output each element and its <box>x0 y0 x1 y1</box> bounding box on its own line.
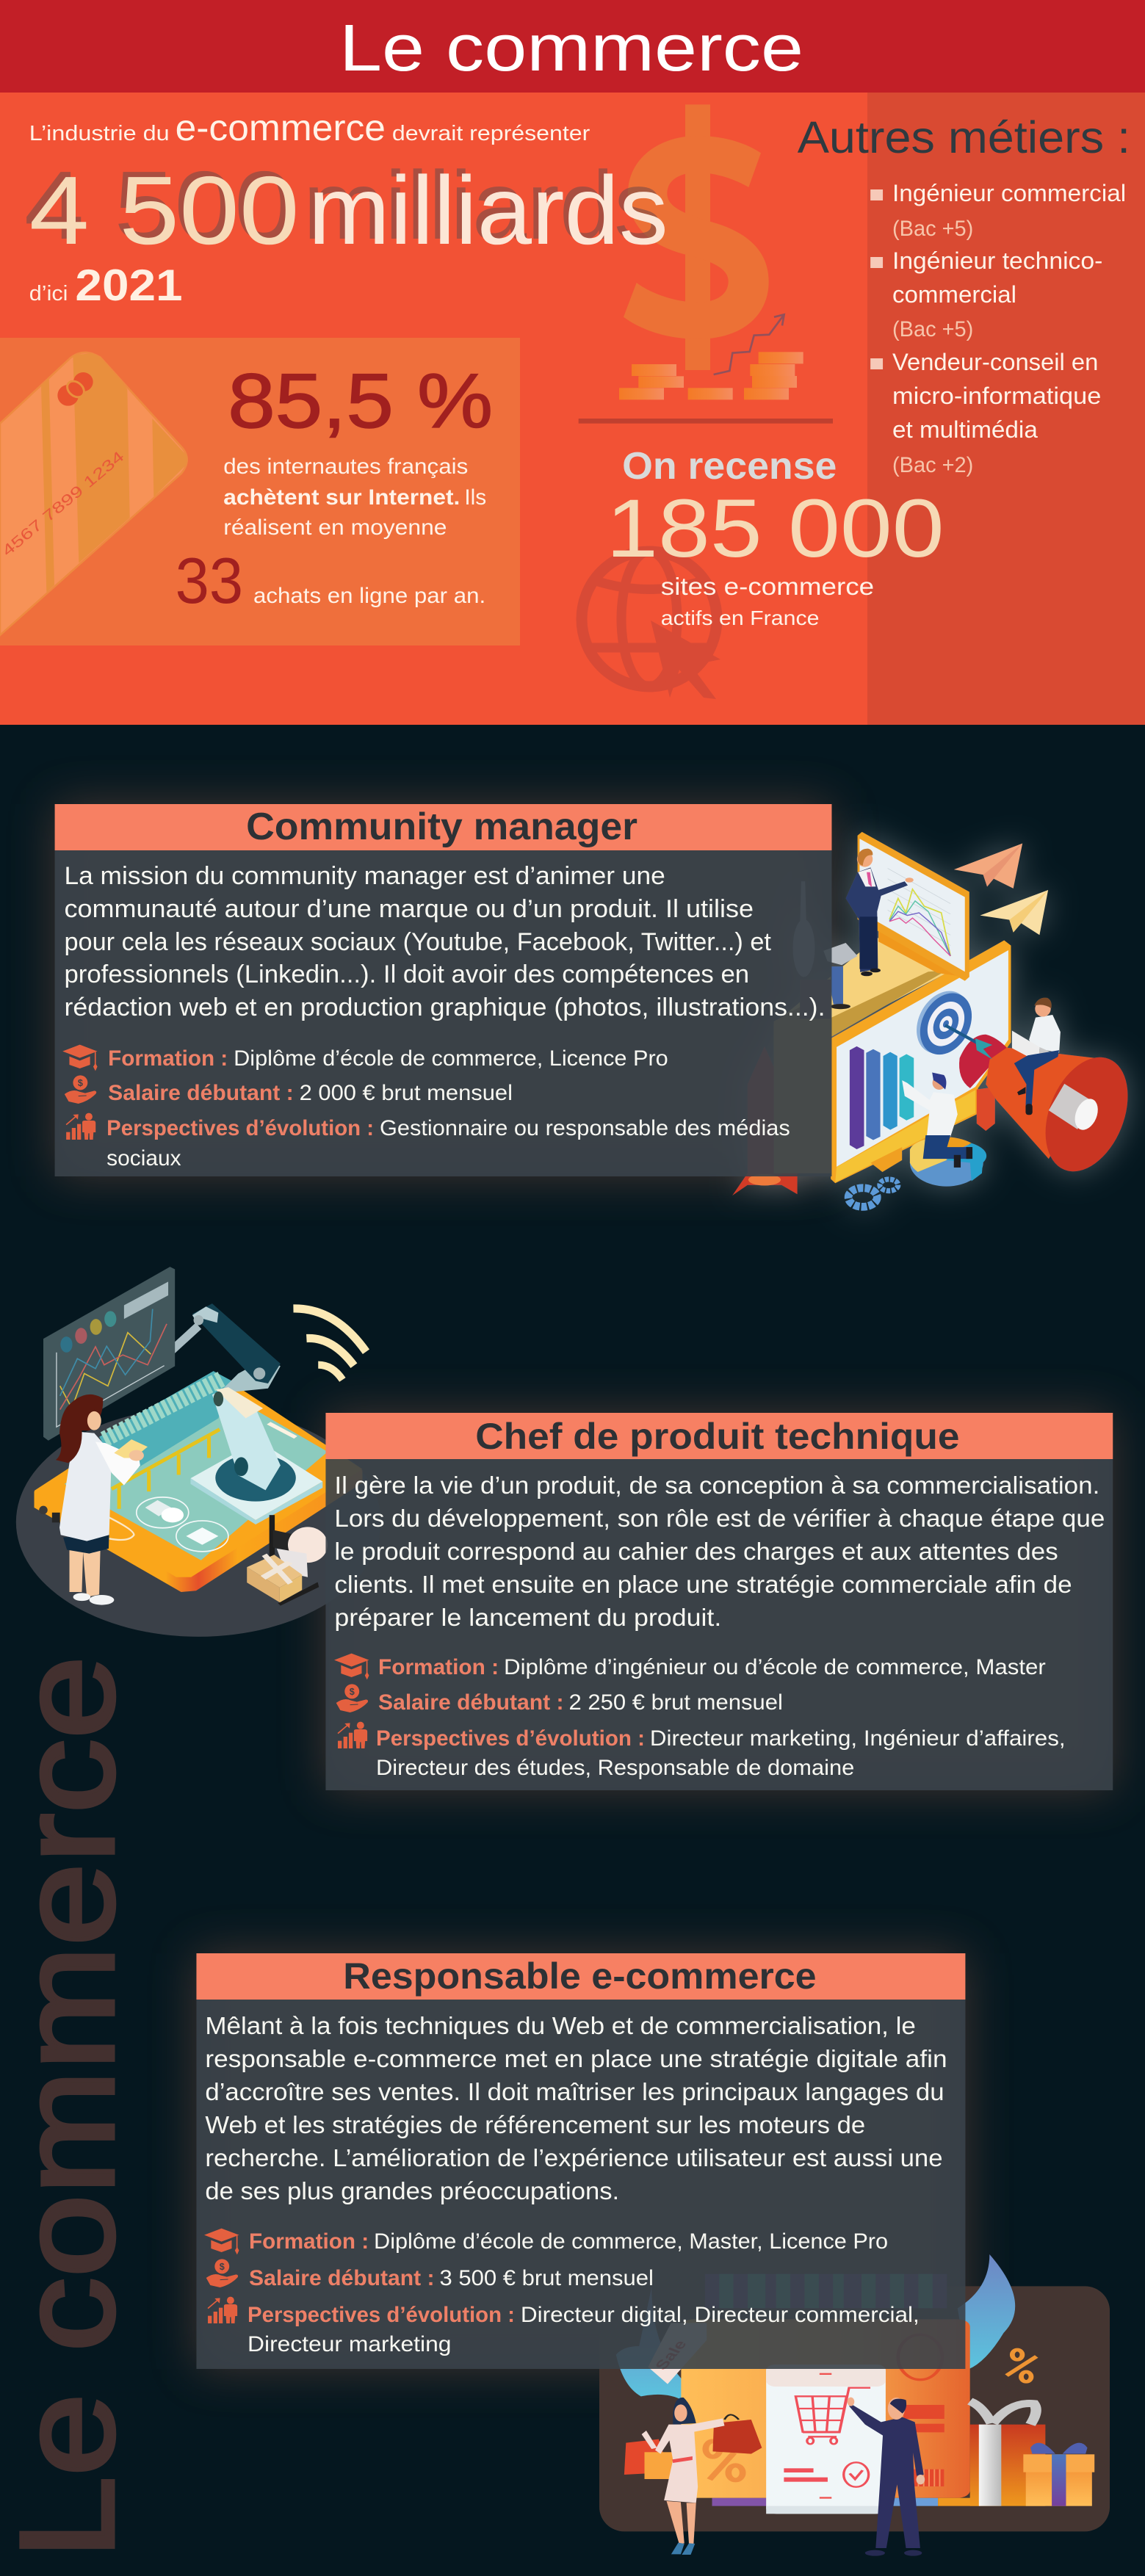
stat description <box>223 455 486 608</box>
seated figure with tablet <box>793 881 858 1019</box>
description: rédaction web et en production graphique (photos, illustrations...). <box>64 994 826 1021</box>
forklift and box <box>247 1515 328 1606</box>
icon: formation <box>62 1045 98 1071</box>
stats text block <box>24 107 1130 629</box>
big number: 4 500 milliards: 4 500 <box>24 151 295 259</box>
description: de ses plus grandes préoccupations. <box>205 2177 619 2204</box>
illustration: chef de produit <box>16 1267 381 1637</box>
details <box>376 1655 1066 1780</box>
screen with target and bars <box>831 940 1011 1183</box>
wifi waves <box>293 1309 366 1380</box>
intro text: devrait représenter <box>392 122 590 145</box>
disc <box>16 1407 381 1637</box>
base stripes <box>712 2498 980 2506</box>
description: responsable e-commerce met en place une stratégie digitale afin <box>205 2045 947 2072</box>
details <box>106 1046 790 1171</box>
details: Directeur marketing, Ingénieur d’affaires, <box>650 1726 1066 1751</box>
details: 3 500 € brut mensuel <box>440 2266 654 2290</box>
rocket <box>732 1046 798 1195</box>
on recense: On recense <box>622 444 837 487</box>
stat description: achètent sur Internet. <box>223 485 460 510</box>
panel: chef de produit technique <box>325 1413 1113 1790</box>
phone <box>766 2365 886 2514</box>
stat: 33: 33 <box>176 545 243 617</box>
icon: perspectives <box>66 1113 95 1140</box>
header band <box>0 0 1145 93</box>
man presenting <box>846 849 914 976</box>
backdrop <box>599 2286 1110 2531</box>
stat: 85,5 %: 85,5 % <box>228 358 493 444</box>
gears <box>848 1179 898 1206</box>
card glows <box>55 804 1113 2369</box>
description <box>205 2012 947 2204</box>
percent on card <box>706 2441 743 2480</box>
details: Directeur digital, Directeur commercial, <box>521 2303 920 2327</box>
description: le produit correspond au cahier des charges et aux attentes des <box>334 1538 1058 1565</box>
details <box>248 2229 920 2356</box>
description: Lors du développement, son rôle est de vérifier à chaque étape que <box>334 1505 1105 1532</box>
date: d'ici 2021: d’ici <box>29 282 68 305</box>
title: Le commerce <box>339 12 803 85</box>
panel: statistiques <box>0 93 1145 725</box>
description: Il gère la vie d’un produit, de sa conception à sa commercialisation. <box>334 1472 1099 1499</box>
intro text: L’industrie du <box>29 122 170 145</box>
heading: Community manager <box>246 805 637 847</box>
description: communauté autour d’une marque ou d’un produit. Il utilise <box>64 895 754 923</box>
details: Perspectives d’évolution : <box>248 2303 515 2327</box>
icon: salaire <box>65 1075 96 1104</box>
list: autres métiers: et multimédia <box>892 416 1038 443</box>
details: Directeur des études, Responsable de domaine <box>376 1756 854 1780</box>
list: autres métiers <box>870 180 1126 477</box>
percent sign right <box>1007 2350 1036 2381</box>
chart board <box>858 832 969 981</box>
details: Formation : <box>378 1655 499 1679</box>
card header <box>196 1953 965 2000</box>
cart <box>795 2388 870 2444</box>
icon: dollar and coins <box>579 104 833 424</box>
big number: 4 500 milliards: milliards <box>303 151 663 259</box>
heading: Responsable e-commerce <box>343 1955 817 1997</box>
stat: 185 000: 185 000 <box>606 482 944 574</box>
icon: salaire <box>336 1684 368 1712</box>
list: autres métiers: Ingénieur commercial <box>892 180 1126 206</box>
details: Formation : <box>249 2229 369 2254</box>
sites text: sites e-commerce <box>661 573 874 600</box>
leaves <box>616 2254 1015 2400</box>
card body <box>55 850 831 1176</box>
details: Diplôme d’école de commerce, Licence Pro <box>234 1046 668 1071</box>
description <box>64 862 826 1021</box>
man with suit <box>848 2398 925 2556</box>
bars <box>850 1046 864 1149</box>
sites text: actifs en France <box>661 607 820 629</box>
icon: salaire <box>206 2259 238 2287</box>
date: d'ici 2021: 2021 <box>75 261 183 310</box>
details: 2 000 € brut mensuel <box>300 1081 513 1105</box>
stat description: Ils <box>464 485 486 510</box>
woman shopper <box>624 2398 762 2555</box>
list: autres métiers: (Bac +2) <box>892 453 973 477</box>
intro text: e-commerce <box>176 107 386 148</box>
list: autres métiers: (Bac +5) <box>892 317 973 341</box>
gift boxes <box>970 2401 1094 2506</box>
man kneeling <box>902 1072 986 1187</box>
conveyor <box>99 1371 232 1509</box>
stat description: réalisent en moyenne <box>223 515 447 540</box>
panel: responsable e-commerce <box>196 1953 965 2369</box>
dashboard <box>43 1267 175 1441</box>
date: d'ici 2021 <box>29 261 183 310</box>
details: Salaire débutant : <box>108 1081 294 1105</box>
illustration: community manager <box>732 832 1144 1206</box>
heading: Chef de produit technique <box>475 1416 959 1457</box>
icon: formation <box>204 2229 239 2254</box>
details: Directeur marketing <box>248 2332 451 2356</box>
description: recherche. L’amélioration de l’expérience utilisateur est aussi une <box>205 2144 943 2171</box>
details: Diplôme d’ingénieur ou d’école de commerce, Master <box>504 1655 1046 1679</box>
barcode <box>705 2274 947 2308</box>
sites text <box>661 573 874 629</box>
list: autres métiers: Ingénieur technico- <box>892 247 1102 274</box>
big number: 4 500 milliards: milliards <box>308 156 668 264</box>
description: Mêlant à la fois techniques du Web et de commercialisation, le <box>205 2012 916 2039</box>
paper planes <box>954 844 1048 935</box>
card body <box>196 2000 965 2369</box>
description: professionnels (Linkedin...). Il doit avoir des compétences en <box>64 960 749 988</box>
icon: credit card: 4567 7899 1234 <box>0 448 128 560</box>
details: Salaire débutant : <box>249 2266 435 2290</box>
icon: perspectives <box>338 1722 367 1748</box>
tablet <box>35 1372 362 1592</box>
list: autres métiers: micro-informatique <box>892 383 1101 409</box>
orange card <box>681 2319 970 2498</box>
details: Perspectives d’évolution : <box>376 1726 645 1751</box>
man on megaphone <box>1012 998 1061 1115</box>
description <box>334 1472 1105 1631</box>
card body <box>325 1459 1113 1790</box>
details: Gestionnaire ou responsable des médias <box>380 1116 790 1140</box>
details: Perspectives d’évolution : <box>106 1116 374 1140</box>
description: La mission du community manager est d’animer une <box>64 862 665 890</box>
list: autres métiers: commercial <box>892 281 1016 308</box>
details: Salaire débutant : <box>378 1690 564 1715</box>
description: préparer le lancement du produit. <box>334 1604 721 1631</box>
arrow <box>945 1025 992 1060</box>
icon: perspectives <box>208 2297 237 2323</box>
robot arm <box>169 1303 322 1524</box>
description: clients. Il met ensuite en place une stratégie commerciale afin de <box>334 1571 1072 1598</box>
details: Diplôme d’école de commerce, Master, Licence Pro <box>374 2229 888 2254</box>
megaphone <box>959 1035 1144 1184</box>
description: Web et les stratégies de référencement sur les moteurs de <box>205 2111 865 2138</box>
card header <box>55 804 831 850</box>
card header <box>325 1413 1113 1459</box>
icon: globe and cursor <box>582 551 720 699</box>
stat description: des internautes français <box>223 455 468 479</box>
big number: 4 500 milliards: 4 500 <box>29 156 300 264</box>
details: Formation : <box>108 1046 228 1071</box>
panel: community manager <box>55 804 831 1176</box>
target <box>906 982 982 1064</box>
icon: formation <box>334 1654 369 1679</box>
intro text <box>29 107 590 148</box>
woman in lab coat <box>56 1394 148 1605</box>
icon: credit card <box>0 352 191 635</box>
sale tag <box>648 2323 707 2384</box>
big number: 4 500 milliards <box>24 151 668 264</box>
panel: carte bancaire background <box>0 338 520 645</box>
illustration: responsable e-commerce <box>599 2254 1110 2556</box>
platform <box>773 938 949 1173</box>
details: 2 250 € brut mensuel <box>569 1690 783 1715</box>
chip icons <box>137 1497 228 1552</box>
sale tag: Sale <box>652 2338 691 2372</box>
details: sociaux <box>106 1146 181 1171</box>
panel: autres métiers background <box>867 93 1145 725</box>
list: autres métiers: Vendeur-conseil en <box>892 349 1098 375</box>
stat description: achats en ligne par an. <box>253 584 485 608</box>
description: d’accroître ses ventes. Il doit maîtriser les principaux langages du <box>205 2078 944 2105</box>
list: autres métiers: (Bac +5) <box>892 217 973 241</box>
description: pour cela les réseaux sociaux (Youtube, Facebook, Twitter...) et <box>64 928 771 956</box>
heading: autres métiers: Autres métiers : <box>798 112 1130 162</box>
